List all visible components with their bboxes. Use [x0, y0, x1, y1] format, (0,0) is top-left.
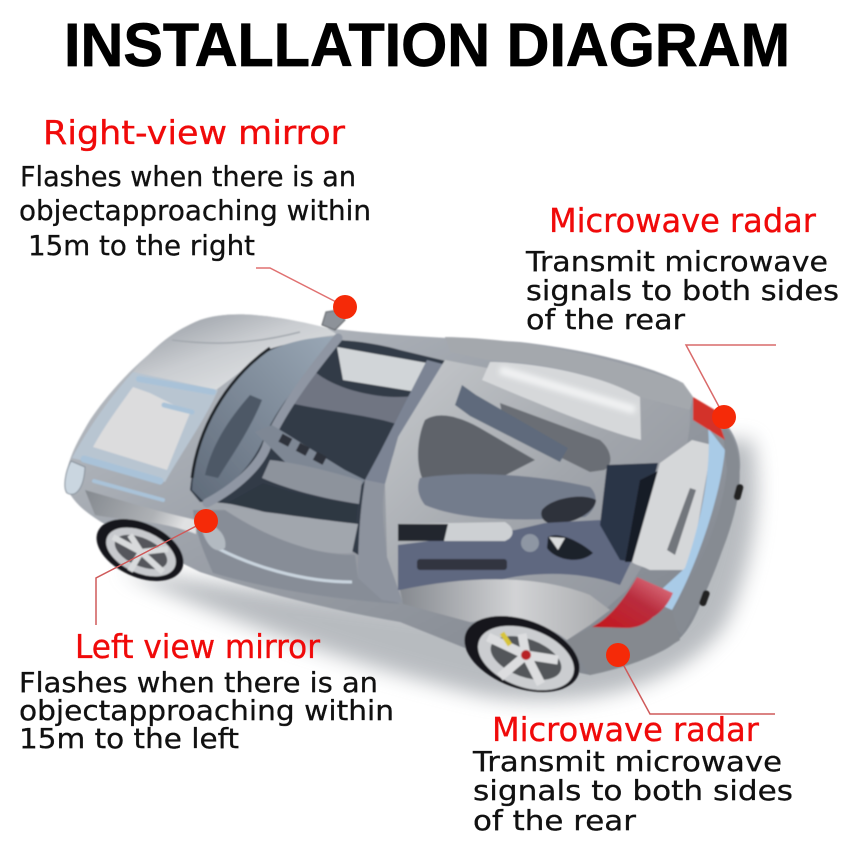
- marker: lower radar: [606, 643, 630, 667]
- marker: right-view mirror: [333, 295, 357, 319]
- right seat: [285, 372, 414, 425]
- right door interior: [337, 347, 427, 392]
- left seat back: [262, 460, 362, 504]
- text block: microwave radar lower: Transmit microwave: [472, 745, 782, 778]
- headlight: [65, 461, 85, 494]
- hood crease: [172, 332, 300, 343]
- door sill trim: [217, 548, 352, 582]
- door post: [358, 480, 403, 603]
- text block: microwave radar upper: Microwave radar: [549, 201, 816, 240]
- leader line: left mirror: [96, 521, 206, 625]
- lower engine lobe: [418, 474, 596, 519]
- text block: left view mirror: [19, 627, 394, 755]
- car illustration: [65, 310, 744, 706]
- right mirror: [322, 310, 345, 330]
- text block: microwave radar lower: signals to both sides: [473, 774, 793, 807]
- rear tire: [454, 602, 590, 706]
- left seat cushion: [227, 483, 358, 524]
- windshield: [192, 337, 338, 503]
- text block: microwave radar upper: of the rear: [526, 303, 686, 336]
- rear wheel: [469, 614, 583, 702]
- text block: microwave radar upper: Transmit microwave: [525, 245, 828, 278]
- front tire: [87, 507, 193, 593]
- cockpit interior: [190, 340, 450, 556]
- left door: [193, 510, 400, 604]
- hood: [133, 314, 338, 390]
- rear bumper: [668, 425, 740, 635]
- text block: left view mirror: objectapproaching within: [19, 694, 394, 727]
- leader line: upper radar: [686, 345, 776, 416]
- text block: right-view mirror: Right-view mirror: [43, 113, 345, 152]
- door sill: [223, 507, 358, 553]
- text block: left view mirror: 15m to the left: [19, 722, 239, 755]
- text block: microwave radar lower: Microwave radar: [492, 710, 759, 749]
- dark rear frame: [600, 463, 658, 562]
- glass highlight bands: [482, 362, 641, 440]
- rear light: [592, 577, 673, 628]
- text block: right-view mirror: [19, 113, 371, 262]
- right tail light: [693, 397, 725, 440]
- diagonal beam: [455, 385, 568, 462]
- text block: microwave radar upper: signals to both sides: [526, 274, 839, 307]
- roll bar: [365, 360, 450, 484]
- marker: left view mirror: [194, 509, 218, 533]
- side frame: [398, 520, 632, 590]
- bumpers: [733, 483, 744, 501]
- text block: right-view mirror: objectapproaching within: [19, 194, 371, 227]
- corner panel: [567, 610, 680, 675]
- front fender highlight: [85, 490, 196, 534]
- front trunk glass: [72, 372, 218, 482]
- leader line: lower radar: [618, 655, 775, 714]
- left engine vent: [418, 415, 535, 478]
- rear roof band: [445, 337, 693, 410]
- text block: right-view mirror: 15m to the right: [28, 229, 255, 262]
- console: [255, 425, 365, 490]
- text block: microwave radar lower: of the rear: [473, 804, 637, 837]
- text block: microwave radar upper: [525, 201, 839, 336]
- text block: right-view mirror: Flashes when there is an: [20, 160, 356, 193]
- text block: microwave radar lower: [472, 710, 793, 837]
- front blue strips: [84, 379, 213, 500]
- trunk panel: [93, 387, 190, 470]
- rear quarter panel: [400, 579, 610, 640]
- leader line: right-view mirror: [256, 268, 344, 306]
- blue strip: [650, 428, 725, 610]
- text block: left view mirror: Flashes when there is an: [19, 666, 378, 699]
- front wheel: [99, 518, 183, 586]
- car shadow: [120, 440, 757, 701]
- rear glass area: [385, 360, 690, 640]
- A pillar: [207, 338, 338, 503]
- marker: upper radar: [712, 405, 736, 429]
- text block: left view mirror: Left view mirror: [75, 627, 320, 666]
- engine bay vents: [500, 403, 610, 472]
- title: INSTALLATION DIAGRAM: [64, 11, 790, 79]
- rear deck: [632, 440, 712, 570]
- car body: [66, 314, 740, 675]
